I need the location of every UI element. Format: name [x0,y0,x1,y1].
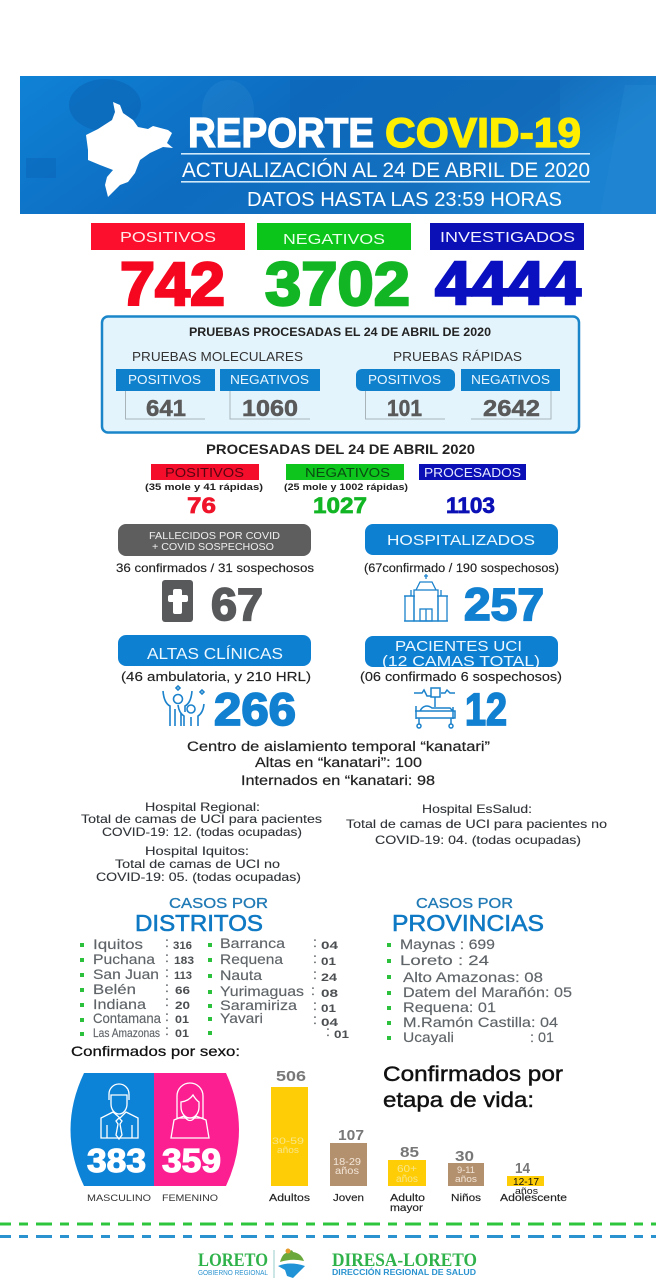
list: distritos column 2: Yurimaguas [220,983,304,999]
stat: hospitalizados: (67confirmado / 190 sospechosos) [364,563,559,575]
icon: woman [171,1083,209,1138]
text: hospital regional: Total de camas de UCI para pacientes [81,812,322,826]
stat: altas clinicas: 266 [214,684,296,735]
moleculares positivos: 641 [146,395,186,421]
list: distritos column 2: : [313,950,317,966]
value: femenino: 359 [162,1142,221,1179]
value: masculino: 383 [87,1142,146,1179]
rapidas negativos: NEGATIVOS [471,373,550,387]
bar: adolescente: Adolescente [500,1193,568,1204]
list: distritos column 1: : [165,993,169,1009]
list: distritos column 2: Yavari [220,1010,263,1026]
totals: investigados [430,223,584,317]
list: distritos column 1: Contamana [93,1010,161,1026]
heading: confirmados por etapa de vida: Confirmados por [383,1063,563,1086]
icon: Loreto map [86,102,173,197]
list: distritos column 1: 183 [174,955,194,967]
stat: pacientes uci: (12 CAMAS TOTAL) [382,653,540,670]
list: distritos column 2: 24 [321,972,338,984]
totals: positivos: 742 [120,250,225,318]
rapidas negativos [461,369,560,421]
totals: investigados: 4444 [435,249,581,317]
moleculares heading: PRUEBAS MOLECULARES [132,349,303,364]
list: distritos column 2: 01 [334,1029,349,1041]
totals: negativos: NEGATIVOS [283,231,385,248]
bar: adultos: años [277,1145,299,1156]
text: hospital regional [81,800,322,839]
icon: regional emblem [278,1248,305,1278]
list: distritos column 2: 01 [321,956,336,968]
heading: casos por provincias [392,895,544,936]
list: distritos column 2: 04 [321,940,339,952]
list: provincias: Requena: 01 [403,999,496,1015]
bar: adultos: 30-59 [272,1136,304,1147]
label: masculino: MASCULINO [87,1193,151,1204]
list: provincias [387,936,572,1045]
icon: man [101,1084,138,1139]
bar: joven [330,1127,367,1204]
stat: fallecidos: + COVID SOSPECHOSO [152,542,274,553]
totals: investigados: INVESTIGADOS [440,229,575,246]
heading: confirmados por etapa de vida: etapa de vida: [383,1089,534,1112]
heading: casos por distritos: DISTRITOS [135,910,263,936]
text: centro de aislamiento [187,739,490,788]
bar: joven: años [335,1166,359,1177]
stat: altas clinicas: (46 ambulatoria, y 210 HRL) [121,669,311,684]
list: distritos column 2: : [311,982,315,998]
bar: adulto mayor: mayor [390,1203,424,1214]
text: hospital iquitos: Hospital Iquitos: [145,844,249,858]
totals: negativos: 3702 [265,250,410,318]
daily negativos: (25 mole y 1002 rápidas) [284,482,408,493]
list: provincias: Loreto : 24 [400,952,489,968]
list: distritos column 1: : [165,934,169,950]
list: distritos column 1: : [165,964,169,980]
bar: adultos: Adultos [269,1193,310,1204]
logo: gobierno regional de loreto [198,1248,305,1278]
logo: gobierno regional de loreto: LORETO [198,1250,268,1271]
list: distritos column 1: 01 [175,1028,189,1040]
list: distritos column 1: 66 [175,985,190,997]
title: REPORTE [188,109,374,156]
stat: hospitalizados [364,524,559,630]
list: provincias: Datem del Marañón: 05 [403,984,572,1000]
bar: ninos: 9-11 [457,1165,475,1176]
heading: casos por provincias: PROVINCIAS [392,910,544,936]
daily negativos [284,464,408,518]
label: femenino: FEMENINO [162,1193,218,1204]
list: distritos column 2: : [313,934,317,950]
stat: fallecidos: FALLECIDOS POR COVID [149,531,280,542]
text: hospital iquitos [96,844,301,884]
list: distritos column 2 [208,934,349,1041]
list: distritos column 1: : [165,979,169,995]
text: hospital iquitos: COVID-19: 05. (todas ocupadas) [96,870,301,884]
text: hospital iquitos: Total de camas de UCI no [115,857,280,871]
daily negativos: NEGATIVOS [305,466,390,480]
icon: hospital [404,574,448,621]
logo: gobierno regional de loreto: GOBIERNO REGIONAL [198,1270,268,1277]
logo: diresa loreto: DIRECCIÓN REGIONAL DE SALUD [332,1268,476,1277]
bar: adultos [269,1068,310,1204]
list: distritos column 2: : [313,1011,317,1027]
daily positivos: POSITIVOS [165,466,244,480]
heading: confirmados por etapa de vida [383,1063,563,1112]
list: distritos column 2: Barranca [220,935,285,951]
list: distritos column 2: Nauta [220,967,262,983]
totals: positivos: POSITIVOS [120,229,216,246]
text: centro de aislamiento: Altas en “kanatari”: 100 [255,755,422,770]
rapidas positivos: 101 [387,395,422,421]
totals: negativos [257,223,411,318]
panel heading: PRUEBAS PROCESADAS EL 24 DE ABRIL DE 2020 [189,325,491,339]
panel: pruebas procesadas [102,316,579,432]
stat: pacientes uci: PACIENTES UCI [395,638,522,655]
heading: confirmados por sexo: Confirmados por sexo: [71,1043,240,1059]
bar: adultos: 506 [276,1068,306,1085]
femenino panel [154,1073,239,1186]
heading: procesadas: PROCESADAS DEL 24 DE ABRIL 2020 [206,441,475,457]
list: distritos column 1: 113 [174,970,192,982]
list: provincias: Alto Amazonas: 08 [403,969,543,985]
list: distritos column 1: : [165,1022,169,1038]
list: distritos column 1: : [165,1008,169,1024]
heading: casos por distritos: CASOS POR [169,895,268,912]
stat: hospitalizados: HOSPITALIZADOS [387,532,535,549]
list: provincias: Maynas : 699 [400,936,495,952]
list: distritos column 1: 316 [173,940,192,952]
list: provincias: M.Ramón Castilla: 04 [403,1014,558,1030]
bar: adulto mayor: Adulto [390,1193,426,1204]
stat: fallecidos [116,524,314,630]
list: distritos column 1: 01 [175,1014,189,1026]
heading: casos por distritos [135,895,268,936]
bar chart: etapa de vida [269,1068,568,1214]
subtitle date: ACTUALIZACIÓN AL 24 DE ABRIL DE 2020 [182,159,590,182]
moleculares negativos [220,369,320,421]
bar: ninos: Niños [451,1193,481,1204]
title: COVID-19 [385,109,581,156]
list: distritos column 2: 04 [321,1017,339,1029]
list: provincias: Ucayali [403,1029,454,1045]
text: hospital essalud: Total de camas de UCI para pacientes no [346,817,607,831]
bar: adolescente [500,1160,568,1204]
list: distritos column 2: : [326,1023,330,1039]
list: distritos column 1: 20 [175,1000,190,1012]
bar: adulto mayor: 60+ [397,1164,417,1175]
stat: hospitalizados: 257 [464,579,544,630]
moleculares negativos: NEGATIVOS [230,373,309,387]
bar: adolescente: 14 [515,1160,531,1177]
banner [20,76,656,214]
daily procesados [419,464,526,518]
moleculares positivos [116,369,215,421]
bar: ninos: 30 [455,1148,474,1165]
subtitle hours: DATOS HASTA LAS 23:59 HORAS [247,189,562,211]
text: hospital essalud: COVID-19: 04. (todas ocupadas) [375,833,581,847]
list: distritos column 1 [80,934,194,1040]
list: provincias: : 01 [530,1029,554,1045]
list: distritos column 2: Saramiriza [220,997,297,1013]
bar: adolescente: años [515,1186,538,1197]
daily positivos: (35 mole y 41 rápidas) [145,482,263,493]
stat: fallecidos: 36 confirmados / 31 sospechosos [116,561,314,575]
list: distritos column 1: : [165,949,169,965]
text: centro de aislamiento: Internados en “kanatari: 98 [241,773,435,788]
icon: people celebrating [163,686,204,726]
daily procesados: PROCESADOS [424,466,521,480]
list: distritos column 2: 01 [321,1003,336,1015]
rapidas negativos: 2642 [483,395,540,421]
stat: pacientes uci: 12 [465,684,507,735]
rapidas heading: PRUEBAS RÁPIDAS [393,349,522,364]
rapidas positivos: POSITIVOS [368,373,441,387]
icon: cross [162,580,193,622]
text: hospital essalud: Hospital EsSalud: [422,802,532,816]
list: distritos column 2: : [313,966,317,982]
daily positivos [145,464,263,518]
list: distritos column 2: : [313,997,317,1013]
chart: confirmados por sexo [70,1073,239,1204]
stat: altas clinicas: ALTAS CLÍNICAS [147,646,283,663]
list: distritos column 1: San Juan [93,966,159,982]
text: centro de aislamiento: Centro de aislamiento temporal “kanatari” [187,739,490,754]
masculino panel [70,1073,154,1186]
logo: diresa loreto: DIRESA-LORETO [332,1250,477,1271]
list: distritos column 2: 08 [321,988,338,1000]
icon: hospital bed [414,688,455,728]
bar: adulto mayor: 85 [400,1144,419,1161]
rapidas positivos [356,369,455,421]
stat: pacientes uci [360,636,562,735]
list: distritos column 1: Indiana [93,996,146,1012]
daily positivos: 76 [187,493,216,518]
stat: fallecidos: 67 [211,579,263,630]
bar: joven: 107 [338,1127,364,1144]
heading: casos por provincias: CASOS POR [416,895,513,912]
bar: adulto mayor: años [396,1174,418,1185]
text: hospital regional: Hospital Regional: [145,800,260,814]
bar: adolescente: 12-17 [513,1177,539,1188]
bar: adulto mayor [388,1144,426,1214]
totals: positivos [91,223,245,318]
list: distritos column 1: Belén [93,981,136,997]
list: distritos column 1: Iquitos [93,936,143,952]
moleculares negativos: 1060 [242,395,298,421]
bar: joven: Joven [333,1193,364,1204]
text: hospital regional: COVID-19: 12. (todas ocupadas) [102,825,302,839]
stat: altas clinicas [118,635,311,735]
list: distritos column 2: Requena [220,951,283,967]
list: distritos column 1: Las Amazonas [93,1026,160,1040]
bar: ninos: años [455,1174,477,1185]
daily negativos: 1027 [313,493,367,518]
bar: joven: 18-29 [333,1157,361,1168]
bar: ninos [448,1148,484,1204]
daily procesados: 1103 [446,493,495,518]
title [188,109,581,156]
text: hospital essalud [346,802,607,847]
stat: pacientes uci: (06 confirmado 6 sospechosos) [360,669,562,684]
moleculares positivos: POSITIVOS [128,373,201,387]
list: distritos column 1: Puchana [93,951,155,967]
